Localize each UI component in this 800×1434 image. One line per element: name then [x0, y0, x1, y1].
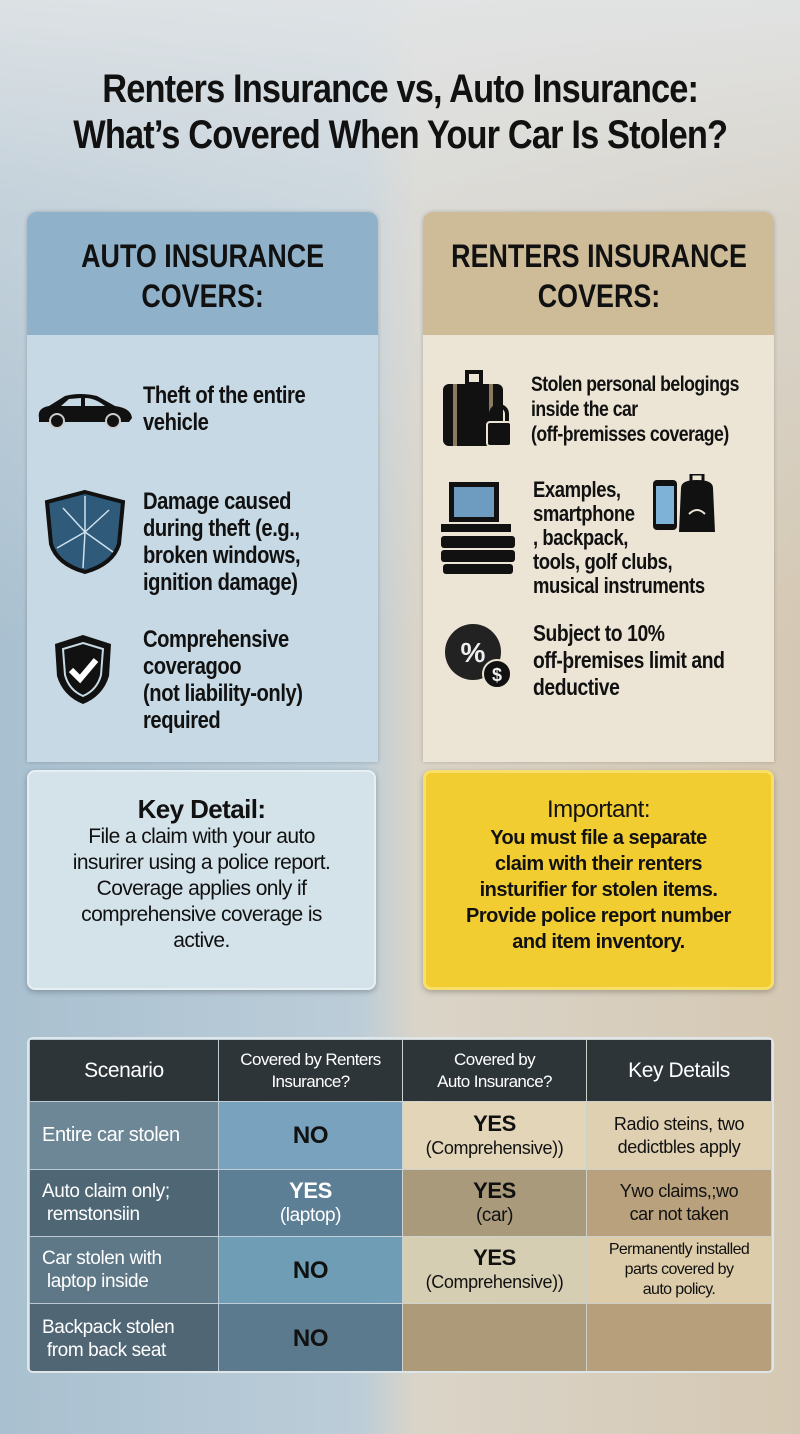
heading: renters insurance covers	[423, 212, 774, 335]
table: scenario comparison: YES	[473, 1245, 516, 1270]
table: scenario comparison: Covered by Renters	[240, 1050, 381, 1068]
item: stolen belongings: Stolen personal belogings	[531, 373, 739, 396]
item: examples: Examples,	[533, 477, 621, 502]
table: scenario comparison: parts covered by	[625, 1261, 733, 1278]
table: scenario comparison	[27, 1037, 774, 1373]
item: comprehensive coverage: required	[143, 707, 220, 734]
item: examples: smartphone	[533, 501, 635, 526]
item: theft of vehicle	[38, 382, 305, 436]
callout: key detail: File a claim with your auto	[88, 825, 315, 848]
item: damage during theft: broken windows,	[143, 542, 300, 569]
icon: percent coin: %	[461, 637, 486, 668]
callout: key detail: insurirer using a police report.	[73, 851, 330, 874]
table: scenario comparison: NO	[293, 1122, 328, 1149]
panel: renters insurance	[423, 212, 774, 762]
title: What’s Covered When Your Car Is Stolen?	[73, 113, 727, 157]
table: scenario comparison: Entire car stolen	[42, 1124, 180, 1146]
table: scenario comparison: Car stolen with	[42, 1248, 162, 1269]
table: scenario comparison: Scenario	[84, 1059, 164, 1082]
icon: cracked shield	[44, 490, 126, 574]
callout: key detail	[27, 770, 376, 990]
item: examples: , backpack,	[533, 525, 628, 550]
panel: auto insurance	[27, 212, 378, 762]
table: scenario comparison: YES	[473, 1178, 516, 1203]
callout: important: Provide police report number	[466, 905, 731, 927]
table: scenario comparison: YES	[473, 1110, 516, 1136]
item: subject to limit: Subject to 10%	[533, 620, 665, 646]
icon: suitcase with lock	[443, 370, 510, 446]
callout: key detail: Coverage applies only if	[97, 877, 306, 900]
table: scenario comparison: (laptop)	[280, 1205, 341, 1226]
item: comprehensive coverage	[55, 626, 303, 734]
heading: renters insurance covers: COVERS:	[538, 278, 660, 314]
callout: important: and item inventory.	[512, 931, 685, 953]
callout: important: insturifier for stolen items.	[480, 879, 717, 901]
table: scenario comparison: NO	[293, 1256, 328, 1284]
icon: percent coin	[445, 624, 510, 687]
table: scenario comparison: (Comprehensive))	[426, 1272, 563, 1292]
item: comprehensive coverage: (not liability-only)	[143, 680, 303, 707]
callout: important: You must file a separate	[490, 827, 707, 849]
heading: auto insurance covers	[27, 212, 378, 335]
table: scenario comparison: laptop inside	[47, 1271, 148, 1292]
table: scenario comparison: Insurance?	[271, 1072, 350, 1090]
item: comprehensive coverage: coveragoo	[143, 653, 241, 680]
icon: laptop and bags	[441, 482, 515, 574]
item: damage during theft	[44, 488, 300, 596]
table: scenario comparison: Radio steins, two	[614, 1114, 744, 1134]
item: theft of vehicle: vehicle	[143, 409, 208, 436]
item: stolen belongings: (off-þremisses coverage)	[531, 423, 729, 446]
item: subject to limit	[445, 620, 725, 700]
icon: phone and backpack	[653, 474, 715, 532]
item: comprehensive coverage: Comprehensive	[143, 626, 289, 653]
table: scenario comparison: Covered by	[454, 1050, 535, 1068]
callout: important: claim with their renters	[495, 853, 702, 875]
table: scenario comparison: NO	[293, 1325, 328, 1352]
table: scenario comparison: dedictbles apply	[618, 1136, 740, 1156]
callout: important: Important:	[547, 796, 650, 823]
table: scenario comparison: Key Details	[628, 1059, 730, 1082]
icon: percent coin: $	[492, 665, 502, 685]
table: scenario comparison: from back seat	[47, 1340, 166, 1360]
item: stolen belongings	[443, 370, 739, 446]
title	[73, 67, 727, 157]
table: scenario comparison: (Comprehensive))	[426, 1138, 563, 1158]
heading: auto insurance covers: AUTO INSURANCE	[81, 238, 324, 274]
icon: shield check	[55, 635, 111, 704]
table: scenario comparison: (car)	[476, 1205, 513, 1226]
table: scenario comparison: YES	[289, 1178, 332, 1203]
item: damage during theft: ignition damage)	[143, 569, 298, 596]
item: stolen belongings: inside the car	[531, 398, 638, 421]
item: examples	[441, 474, 715, 598]
table: scenario comparison: auto policy.	[643, 1281, 715, 1298]
table: scenario comparison: Ywo claims,;wo	[620, 1181, 738, 1201]
table: scenario comparison: Backpack stolen	[42, 1316, 174, 1338]
item: examples: tools, golf clubs,	[533, 549, 672, 574]
item: subject to limit: deductive	[533, 674, 619, 700]
table: scenario comparison: Auto Insurance?	[437, 1072, 552, 1090]
callout: key detail: active.	[173, 929, 230, 952]
item: damage during theft: Damage caused	[143, 488, 291, 515]
table: scenario comparison: Auto claim only;	[42, 1181, 170, 1202]
title: Renters Insurance vs, Auto Insurance:	[102, 67, 698, 111]
panel: renters insurance: musical instruments	[533, 573, 705, 598]
table: scenario comparison: Permanently installed	[609, 1241, 749, 1258]
heading: auto insurance covers: COVERS:	[141, 278, 264, 314]
item: damage during theft: during theft (e.g.,	[143, 515, 300, 542]
heading: renters insurance covers: RENTERS INSURANCE	[451, 238, 747, 274]
callout: key detail: comprehensive coverage is	[81, 903, 322, 926]
table: scenario comparison: car not taken	[630, 1204, 728, 1224]
callout: key detail: Key Detail:	[138, 794, 265, 824]
item: subject to limit: off-þremises limit and	[533, 647, 725, 673]
icon: car	[38, 394, 132, 429]
table: scenario comparison: remstonsiin	[47, 1204, 140, 1225]
callout: important	[423, 770, 774, 990]
item: theft of vehicle: Theft of the entire	[143, 382, 305, 409]
